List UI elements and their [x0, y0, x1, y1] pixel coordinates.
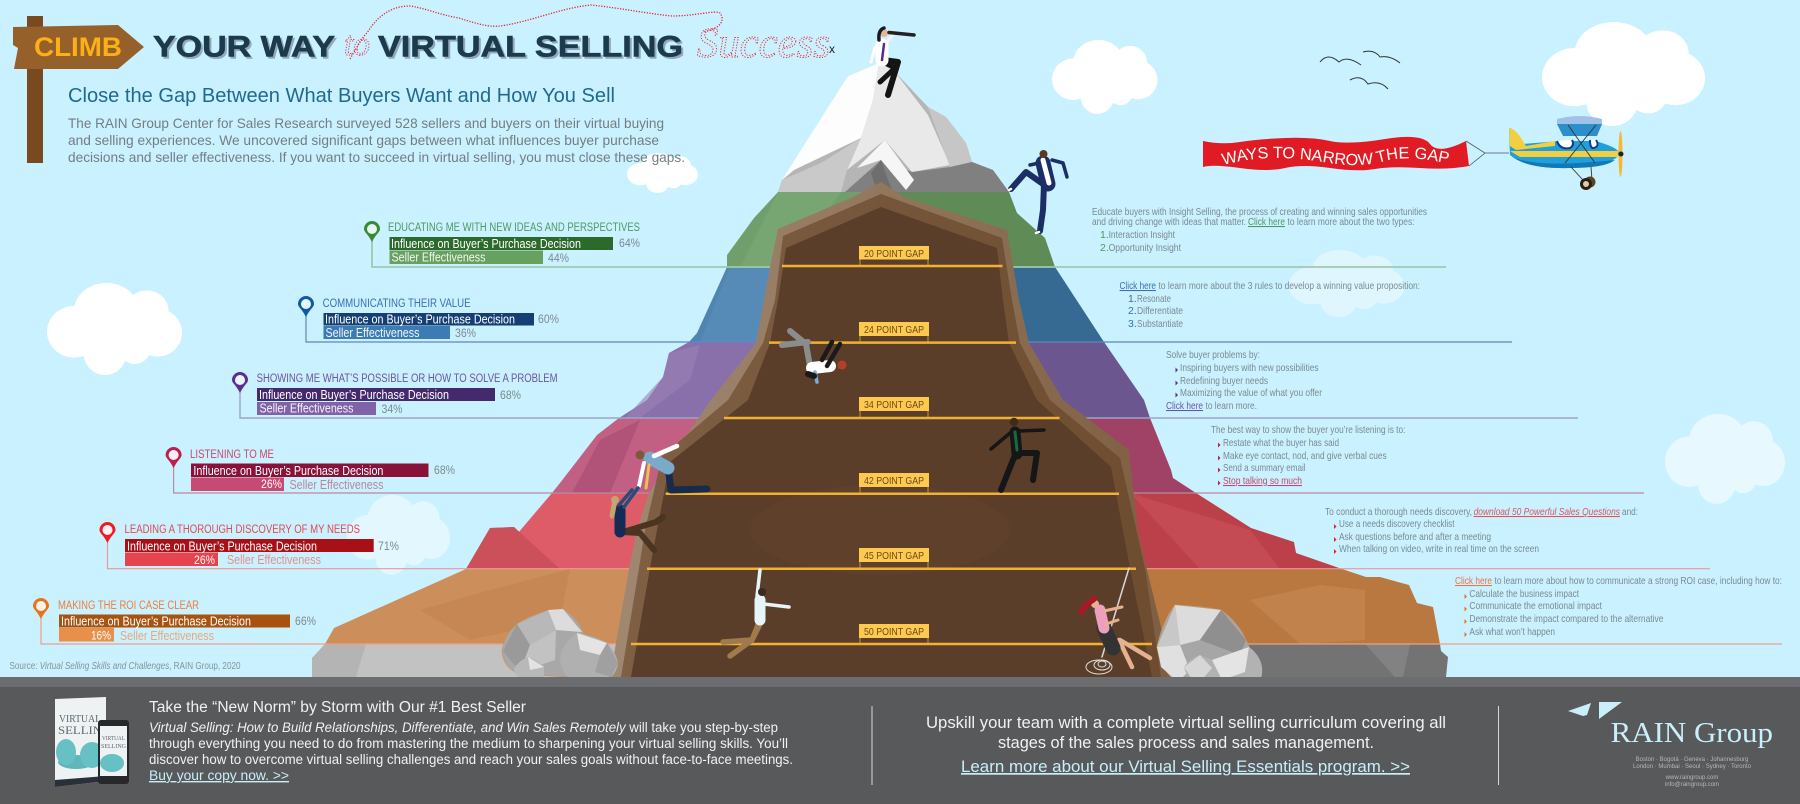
book and phone — [55, 697, 129, 787]
block: educate text: Opportunity Insight — [1109, 242, 1181, 254]
gap 34: 34 POINT GAP — [864, 399, 924, 411]
bars: Seller Effectiveness — [326, 326, 420, 340]
block: solve text: Click here — [1166, 400, 1203, 412]
title: dotted script to and success: to — [344, 26, 370, 63]
bars: Seller Effectiveness — [260, 402, 354, 416]
block: discovery text — [1325, 506, 1638, 555]
book and phone: SELLIN — [58, 723, 102, 737]
gap 24: 24 POINT GAP — [864, 324, 924, 336]
sign post: CLIMB — [13, 16, 144, 163]
title: your way: VIRTUAL SELLING — [378, 30, 683, 64]
bars — [257, 388, 521, 416]
row: possible — [232, 372, 558, 416]
bars: 26% — [194, 553, 215, 567]
intro paragraph — [68, 115, 685, 165]
block: value text: to learn more about the 3 rules to develop a winning value proposition: — [1158, 280, 1420, 292]
intro paragraph: decisions and seller effectiveness. If you want to succeed in virtual selling, you must close these gaps. — [68, 149, 685, 165]
block: value text: 1. — [1128, 293, 1137, 305]
row: value — [298, 296, 559, 340]
gap 34 — [724, 397, 1060, 418]
curriculum text: stages of the sales process and sales management. — [998, 734, 1374, 752]
book promo text: Buy your copy now. >> — [149, 767, 289, 783]
block: educate text: to learn more about the two types: — [1288, 216, 1414, 228]
source: Source: Virtual Selling Skills and Challenges, RAIN Group, 2020 — [10, 661, 241, 672]
band: orange — [325, 569, 1440, 644]
figure: woman with telescope on summit — [871, 28, 914, 95]
title: dotted script to and success — [344, 5, 830, 67]
band: blue — [689, 267, 1104, 342]
block: educate text: 1. — [1100, 229, 1109, 241]
book and phone: VIRTUAL — [102, 736, 125, 742]
row title: EDUCATING ME WITH NEW IDEAS AND PERSPECTIVES — [388, 222, 640, 234]
block: solve text: Redefining buyer needs — [1180, 375, 1268, 387]
bars — [59, 614, 316, 643]
block: solve text: Maximizing the value of what you offer — [1180, 387, 1322, 399]
block: solve text: Inspiring buyers with new possibilities — [1180, 362, 1319, 374]
pin — [232, 372, 248, 393]
RAIN Group logo — [1568, 702, 1773, 788]
book and phone: VIRTUAL — [59, 714, 101, 725]
divider — [871, 706, 873, 785]
row title: SHOWING ME WHAT’S POSSIBLE OR HOW TO SOLVE A PROBLEM — [257, 373, 558, 385]
cloud: top left under paragraph — [627, 153, 698, 193]
cloud: translucent left — [347, 495, 450, 575]
row lines — [41, 240, 1782, 644]
band: crimson — [552, 418, 1196, 493]
bars: 68% — [434, 465, 455, 477]
bars: Influence on Buyer’s Purchase Decision — [127, 540, 317, 554]
block: listening text — [1211, 424, 1405, 487]
pin — [364, 221, 380, 242]
row: discovery — [100, 522, 399, 567]
birds — [1320, 51, 1400, 89]
block: solve text — [1166, 349, 1322, 412]
row: listening — [166, 447, 455, 492]
figure: businessman climbing — [1009, 150, 1067, 233]
figure: man hanging from rope — [723, 570, 789, 656]
band: green — [727, 192, 1055, 267]
pin — [298, 296, 314, 317]
cloud: left white — [47, 283, 182, 375]
gap 24 — [769, 322, 1016, 343]
block: roi text: Communicate the emotional impact — [1469, 600, 1602, 612]
block: roi text: Ask what won’t happen — [1469, 626, 1555, 638]
block: value text: Substantiate — [1137, 318, 1183, 330]
RAIN Group logo: Boston · Bogotá · Geneva · Johannesburg — [1636, 757, 1748, 763]
bars: Influence on Buyer’s Purchase Decision — [61, 614, 251, 628]
figure: blonde woman climbing — [611, 488, 663, 550]
bars: Seller Effectiveness — [290, 478, 384, 492]
bars: 16% — [91, 628, 111, 642]
row title: LEADING A THOROUGH DISCOVERY OF MY NEEDS — [124, 524, 360, 536]
bars: 71% — [378, 541, 399, 553]
block: discovery text: To conduct a thorough needs discovery, — [1325, 506, 1472, 518]
book and phone: SELLING — [101, 743, 126, 750]
title: dotted script to and success: Success — [697, 21, 830, 67]
bars: Influence on Buyer’s Purchase Decision — [325, 312, 515, 326]
block: roi text — [1455, 575, 1782, 638]
band: red — [466, 493, 1342, 569]
intro paragraph: The RAIN Group Center for Sales Research surveyed 528 sellers and buyers on their virtual buying — [68, 115, 664, 131]
bars: Influence on Buyer’s Purchase Decision — [259, 388, 449, 402]
book promo text: through everything you need to do from mastering the medium to sharpening your virtual selling skills. You’ll — [149, 736, 788, 751]
bars: 36% — [455, 328, 476, 340]
block: discovery text: Ask questions before and after a meeting — [1339, 531, 1491, 543]
block: discovery text: Use a needs discovery checklist — [1339, 518, 1455, 530]
figure: red-haired woman on rope — [1081, 568, 1150, 674]
figure: woman with green tie — [991, 418, 1044, 490]
bars: 26% — [261, 477, 282, 491]
RAIN Group logo: London · Mumbai · Seoul · Sydney · Toronto — [1633, 764, 1752, 770]
book promo text — [149, 699, 793, 783]
row: roi — [33, 598, 316, 643]
cloud: translucent centre right — [1289, 250, 1404, 317]
mine shaft — [610, 182, 1171, 677]
block: educate text: Interaction Insight — [1109, 229, 1175, 241]
sign label: CLIMB — [34, 32, 122, 62]
book promo text: discover how to overcome virtual selling challenges and reach your sales goals without face-to-face meetings. — [149, 752, 793, 767]
block: educate text — [1092, 206, 1427, 254]
block: value text: Resonate — [1137, 293, 1171, 305]
bars: 68% — [500, 390, 521, 402]
gap 50 — [631, 624, 1152, 644]
block: roi text: Calculate the business impact — [1469, 588, 1579, 600]
gap 20 — [782, 246, 1002, 266]
book promo text: Take the “New Norm” by Storm with Our #1 Best Seller — [149, 699, 526, 716]
gap 45: 45 POINT GAP — [864, 550, 924, 562]
gap ropes and labels — [631, 246, 1152, 644]
block: value text: 2. — [1128, 305, 1137, 317]
cloud: translucent far right — [1665, 414, 1785, 504]
block: listening text: Send a summary email — [1223, 462, 1306, 474]
bars: 34% — [382, 404, 402, 416]
RAIN Group logo: info@raingroup.com — [1665, 782, 1719, 788]
block: listening text: The best way to show the buyer you’re listening is to: — [1211, 424, 1405, 436]
row: educating — [364, 221, 640, 265]
snow peak — [778, 63, 1009, 192]
block: educate text: and driving change with ideas that matter. — [1092, 216, 1246, 228]
gap 20: 20 POINT GAP — [864, 248, 924, 260]
block: discovery text: download 50 Powerful Sales Questions — [1474, 506, 1621, 518]
figure: bearded man reaching down — [636, 446, 707, 490]
mountain — [312, 63, 1448, 677]
pin — [166, 447, 182, 468]
block: solve text: Solve buyer problems by: — [1166, 349, 1260, 361]
banner: ways to narrow the gap: WAYS TO NARROW THE GAP — [1220, 146, 1449, 166]
block: value text: 3. — [1128, 318, 1137, 330]
row title: COMMUNICATING THEIR VALUE — [323, 298, 471, 310]
bars: 60% — [538, 314, 559, 326]
RAIN Group logo: RAIN Group — [1611, 718, 1773, 749]
block: solve text: to learn more. — [1206, 400, 1257, 412]
cloud: behind airplane — [1542, 22, 1705, 126]
title: your way — [153, 30, 683, 64]
footer — [0, 677, 1800, 804]
block: value text — [1120, 280, 1420, 330]
bars: Influence on Buyer’s Purchase Decision — [193, 464, 383, 478]
title: your way: YOUR WAY — [153, 30, 335, 64]
bars — [324, 312, 559, 340]
block: educate text: Educate buyers with Insight Selling, the process of creating and winning sales opportunities — [1092, 206, 1427, 218]
band: purple — [619, 342, 1150, 418]
block: listening text: Make eye contact, nod, and give verbal cues — [1223, 450, 1387, 462]
figure: man hanging upside down — [782, 331, 846, 382]
heading: Close the Gap Between What Buyers Want and How You Sell — [68, 85, 615, 107]
block: roi text: Demonstrate the impact compared to the alternative — [1469, 613, 1664, 625]
intro paragraph: and selling experiences. We uncovered significant gaps between what influences buyer purchase — [68, 132, 659, 148]
block: educate text: Click here — [1248, 216, 1285, 228]
boulders right — [1157, 605, 1262, 684]
block: value text: Click here — [1120, 280, 1156, 292]
curriculum text: Learn more about our Virtual Selling Essentials program. >> — [961, 757, 1410, 776]
band: grey base — [312, 644, 1448, 677]
curriculum text — [926, 714, 1446, 776]
bars: Seller Effectiveness — [227, 553, 321, 567]
curriculum text: Upskill your team with a complete virtual selling curriculum covering all — [926, 714, 1446, 732]
divider — [1498, 706, 1500, 785]
bars: Seller Effectiveness — [392, 250, 486, 264]
book promo text: Virtual Selling: How to Build Relationships, Differentiate, and Win Sales Remotely will take you step-by-step — [149, 720, 778, 735]
gap 45 — [647, 548, 1136, 569]
block: listening text: Restate what the buyer has said — [1223, 437, 1339, 449]
block: listening text: Stop talking so much — [1223, 475, 1302, 487]
success x mark: x — [829, 42, 835, 56]
airplane — [1509, 116, 1624, 190]
bars — [125, 539, 399, 567]
cloud: right of summit — [1052, 40, 1158, 114]
pin — [33, 598, 49, 619]
bars: 66% — [295, 616, 316, 628]
gap 42: 42 POINT GAP — [864, 475, 924, 487]
banner: ways to narrow the gap — [1203, 136, 1509, 170]
block: value text: Differentiate — [1137, 305, 1183, 317]
row title: MAKING THE ROI CASE CLEAR — [58, 600, 199, 612]
bars: 64% — [619, 238, 640, 250]
bars — [390, 237, 640, 265]
block: roi text: Click here — [1455, 575, 1492, 587]
row title: LISTENING TO ME — [190, 449, 274, 461]
bars — [191, 464, 455, 492]
gap 50: 50 POINT GAP — [864, 626, 924, 638]
bars: 44% — [548, 253, 569, 265]
bars: Influence on Buyer’s Purchase Decision — [391, 237, 581, 251]
pin — [100, 522, 116, 543]
boulders left — [502, 609, 618, 678]
block: discovery text: When talking on video, write in real time on the screen — [1339, 543, 1539, 555]
block: educate text: 2. — [1100, 242, 1109, 254]
block: discovery text: and: — [1622, 506, 1638, 518]
bars: Seller Effectiveness — [120, 629, 214, 643]
RAIN Group logo: www.raingroup.com — [1665, 775, 1718, 781]
gap 42 — [666, 473, 1119, 494]
